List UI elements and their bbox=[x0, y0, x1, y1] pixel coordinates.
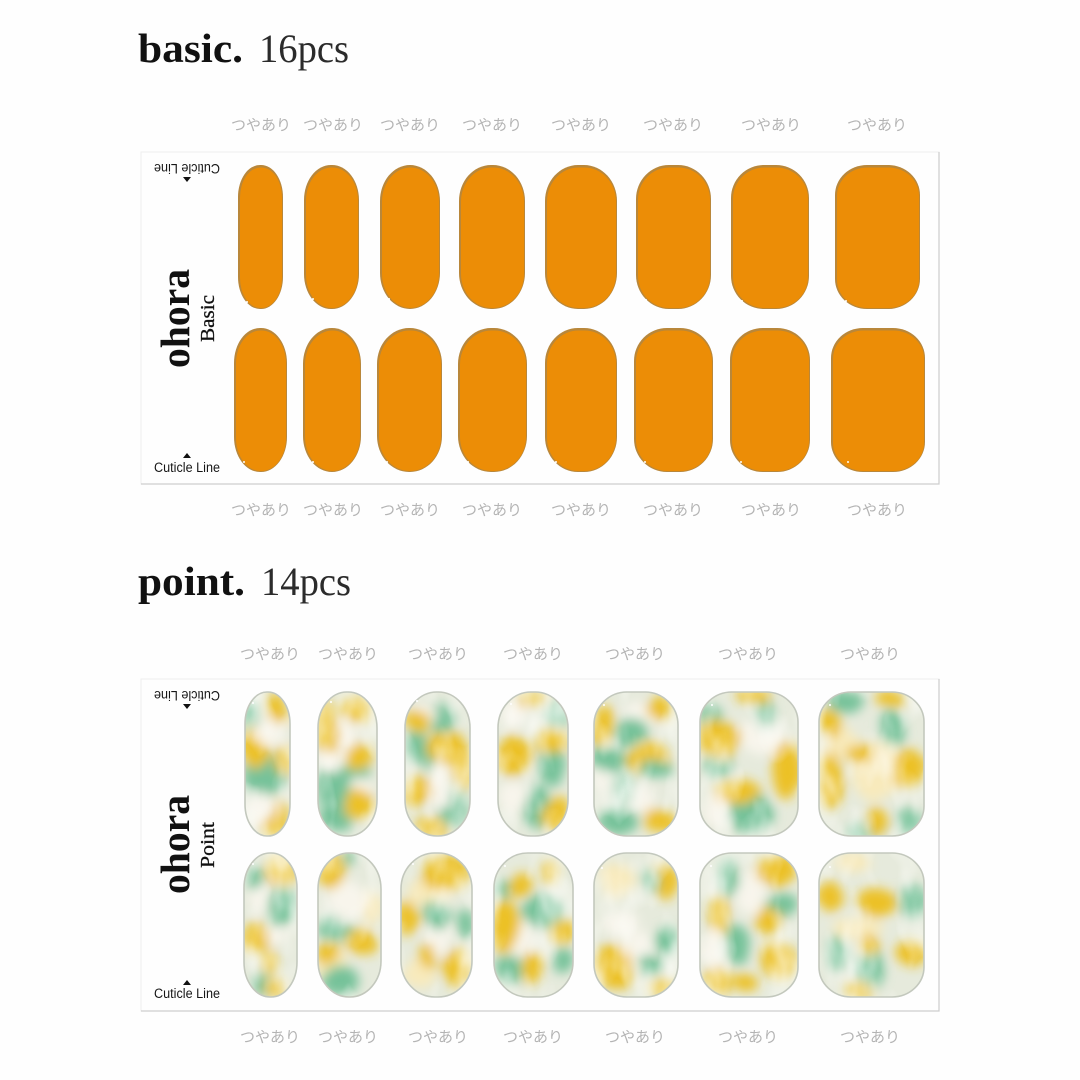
gloss labels above basic sheet: つやあり bbox=[643, 117, 703, 134]
gloss labels below point sheet: つやあり bbox=[718, 1029, 778, 1046]
orange nails: bottom row bbox=[234, 328, 925, 472]
cuticle line marker: top bbox=[154, 161, 220, 182]
gloss labels above basic sheet: つやあり bbox=[462, 117, 522, 134]
gloss labels above basic sheet bbox=[231, 117, 907, 134]
gloss labels above point sheet bbox=[240, 646, 900, 663]
heading: point 14pcs: 14pcs bbox=[261, 559, 351, 604]
gloss labels below basic sheet: つやあり bbox=[643, 502, 703, 519]
heading: point 14pcs: point. bbox=[138, 558, 245, 604]
gloss labels above basic sheet: つやあり bbox=[847, 117, 907, 134]
gloss labels above point sheet: つやあり bbox=[503, 646, 563, 663]
gloss labels above basic sheet: つやあり bbox=[380, 117, 440, 134]
gloss labels above basic sheet: つやあり bbox=[303, 117, 363, 134]
brand: ohora Point bbox=[152, 795, 219, 894]
gloss labels above point sheet: つやあり bbox=[718, 646, 778, 663]
cuticle line marker: top: Cuticle Line bbox=[154, 161, 220, 176]
gloss labels above basic sheet: つやあり bbox=[551, 117, 611, 134]
cuticle line marker: top: Cuticle Line bbox=[154, 688, 220, 703]
panel: basic nail sheet bbox=[141, 152, 939, 484]
gloss labels below point sheet bbox=[240, 1029, 900, 1046]
gloss labels below point sheet: つやあり bbox=[503, 1029, 563, 1046]
brand: ohora Basic: ohora bbox=[152, 269, 198, 368]
gloss labels below basic sheet: つやあり bbox=[462, 502, 522, 519]
cuticle line marker: bottom bbox=[154, 980, 220, 1001]
brand: ohora Point: Point bbox=[197, 822, 219, 868]
cuticle line marker: top bbox=[154, 688, 220, 709]
gloss labels below basic sheet: つやあり bbox=[741, 502, 801, 519]
brand: ohora Point: ohora bbox=[152, 795, 198, 894]
brand: ohora Basic bbox=[152, 269, 219, 368]
gloss labels below basic sheet: つやあり bbox=[380, 502, 440, 519]
gloss labels above point sheet: つやあり bbox=[240, 646, 300, 663]
cuticle line marker: bottom: Cuticle Line bbox=[154, 460, 220, 475]
heading: basic 16pcs bbox=[138, 25, 349, 71]
gloss labels above basic sheet: つやあり bbox=[741, 117, 801, 134]
gloss labels above basic sheet: つやあり bbox=[231, 117, 291, 134]
gloss labels above point sheet: つやあり bbox=[318, 646, 378, 663]
cuticle line marker: bottom bbox=[154, 453, 220, 475]
marble nails: top row bbox=[244, 692, 924, 836]
gloss labels below point sheet: つやあり bbox=[605, 1029, 665, 1046]
orange nails: top row bbox=[238, 165, 920, 309]
heading: basic 16pcs: basic. bbox=[138, 25, 243, 71]
gloss labels below point sheet: つやあり bbox=[240, 1029, 300, 1046]
gloss labels below basic sheet: つやあり bbox=[303, 502, 363, 519]
gloss labels above point sheet: つやあり bbox=[605, 646, 665, 663]
cuticle line marker: bottom: Cuticle Line bbox=[154, 986, 220, 1001]
gloss labels below point sheet: つやあり bbox=[840, 1029, 900, 1046]
gloss labels below basic sheet: つやあり bbox=[231, 502, 291, 519]
heading: point 14pcs bbox=[138, 558, 351, 604]
gloss labels below point sheet: つやあり bbox=[408, 1029, 468, 1046]
brand: ohora Basic: Basic bbox=[197, 295, 219, 342]
gloss labels below point sheet: つやあり bbox=[318, 1029, 378, 1046]
gloss labels below basic sheet bbox=[231, 502, 907, 519]
gloss labels below basic sheet: つやあり bbox=[847, 502, 907, 519]
gloss labels above point sheet: つやあり bbox=[840, 646, 900, 663]
marble nails: bottom row bbox=[244, 853, 924, 997]
gloss labels below basic sheet: つやあり bbox=[551, 502, 611, 519]
heading: basic 16pcs: 16pcs bbox=[259, 26, 349, 71]
gloss labels above point sheet: つやあり bbox=[408, 646, 468, 663]
panel: point nail sheet bbox=[141, 679, 939, 1011]
